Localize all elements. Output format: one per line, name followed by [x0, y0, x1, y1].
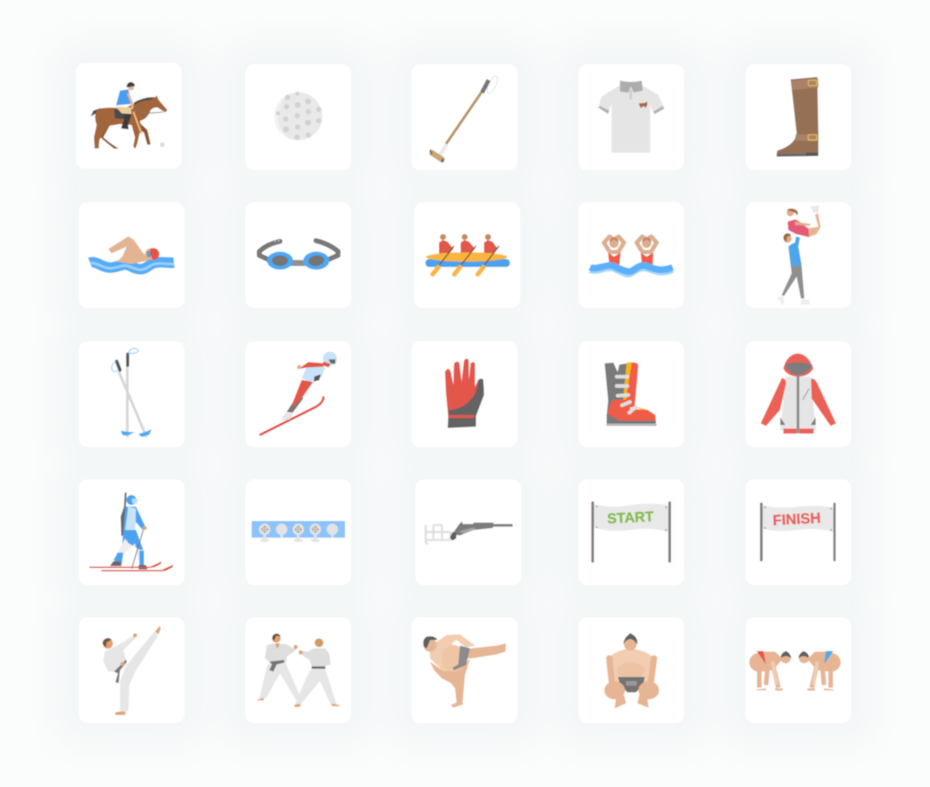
panel: finish banner — [745, 479, 852, 586]
panel: sumo squat — [578, 617, 684, 724]
panel: ski boot — [578, 341, 684, 448]
panel: polo shirt — [578, 64, 684, 170]
panel: figure skaters — [745, 202, 852, 308]
panel: synchronized swimmers — [578, 202, 684, 308]
panel: biathlon rifle — [415, 479, 522, 586]
panel: biathlon targets — [245, 479, 352, 586]
panel: polo mallet — [411, 64, 518, 170]
panel: rowing raft — [414, 202, 520, 308]
panel: swimmer — [78, 202, 185, 308]
panel: sumo bow — [745, 617, 852, 724]
panel: riding boot — [745, 64, 852, 170]
panel: sumo leg raise — [411, 617, 518, 724]
text: FINISH: FINISH — [772, 511, 821, 529]
panel: polo player — [76, 62, 182, 169]
panel: biathlete — [78, 479, 185, 586]
panel: karate sparring — [245, 617, 352, 724]
panel: ski jumper — [245, 341, 352, 448]
panel: ski glove — [411, 341, 518, 448]
panel: karate kick — [78, 617, 185, 724]
panel: polo ball — [245, 64, 352, 170]
panel: ski poles — [78, 341, 185, 448]
panel: swimming goggles — [245, 202, 352, 308]
panel: start banner — [578, 479, 684, 586]
panel: ski jacket — [745, 341, 852, 448]
text: START: START — [607, 509, 654, 528]
